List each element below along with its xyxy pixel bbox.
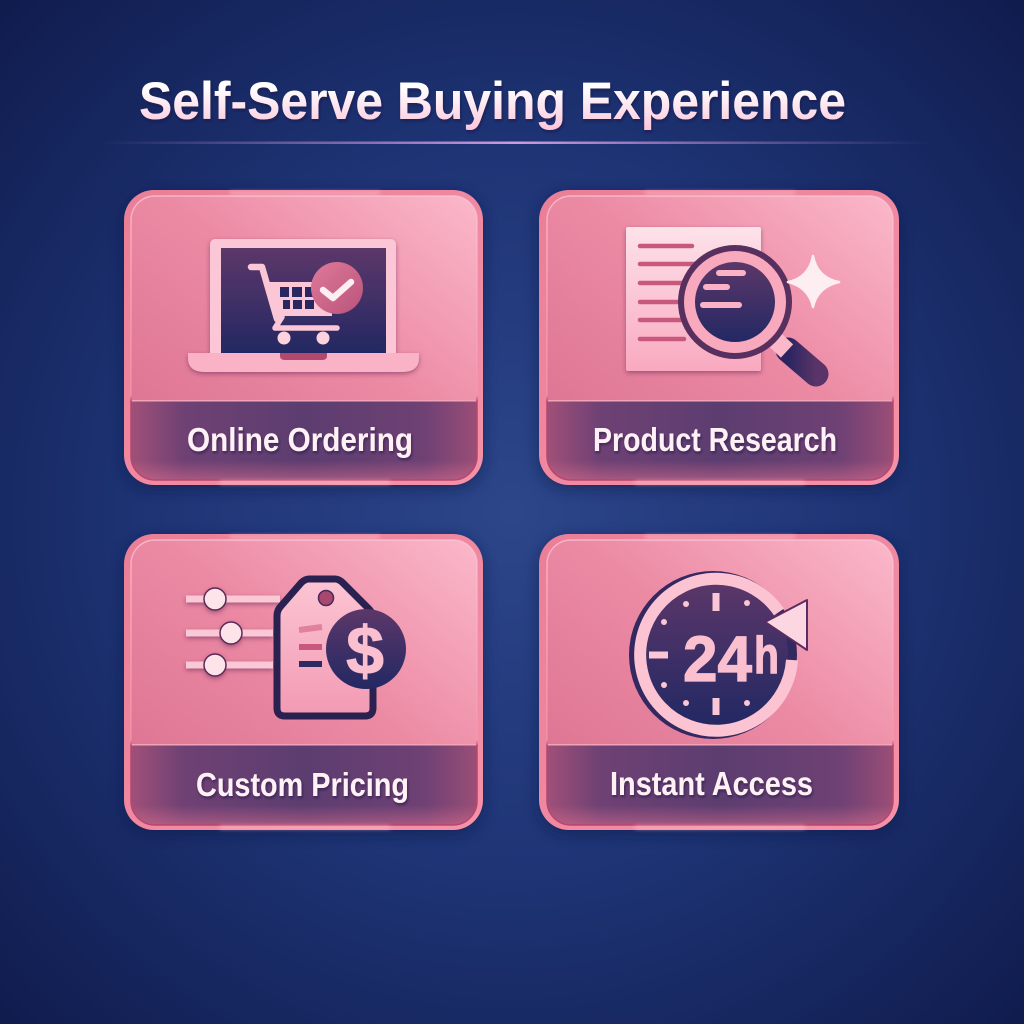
icon: document with magnifier and sparkle (626, 227, 840, 374)
icon: 24h clock with arrow (629, 571, 807, 739)
label: online ordering: Online Ordering (187, 421, 413, 458)
panel: instant access (539, 534, 899, 834)
label: product research: Product Research (593, 421, 837, 458)
panel: product research (539, 190, 899, 489)
icon: 24h clock with arrow: h (754, 627, 779, 685)
label: custom pricing: Custom Pricing (196, 766, 409, 803)
icon: sliders and price tag: $ (346, 613, 384, 689)
panel: online ordering (124, 190, 483, 489)
icon: laptop with shopping cart (188, 239, 419, 372)
title: Self-Serve Buying Experience (139, 72, 846, 131)
icon: 24h clock with arrow: 24 (683, 623, 752, 695)
icon: sliders and price tag (186, 579, 406, 716)
icon: sparkle (787, 255, 840, 308)
panel: custom pricing (124, 534, 483, 834)
label: instant access: Instant Access (610, 765, 813, 802)
